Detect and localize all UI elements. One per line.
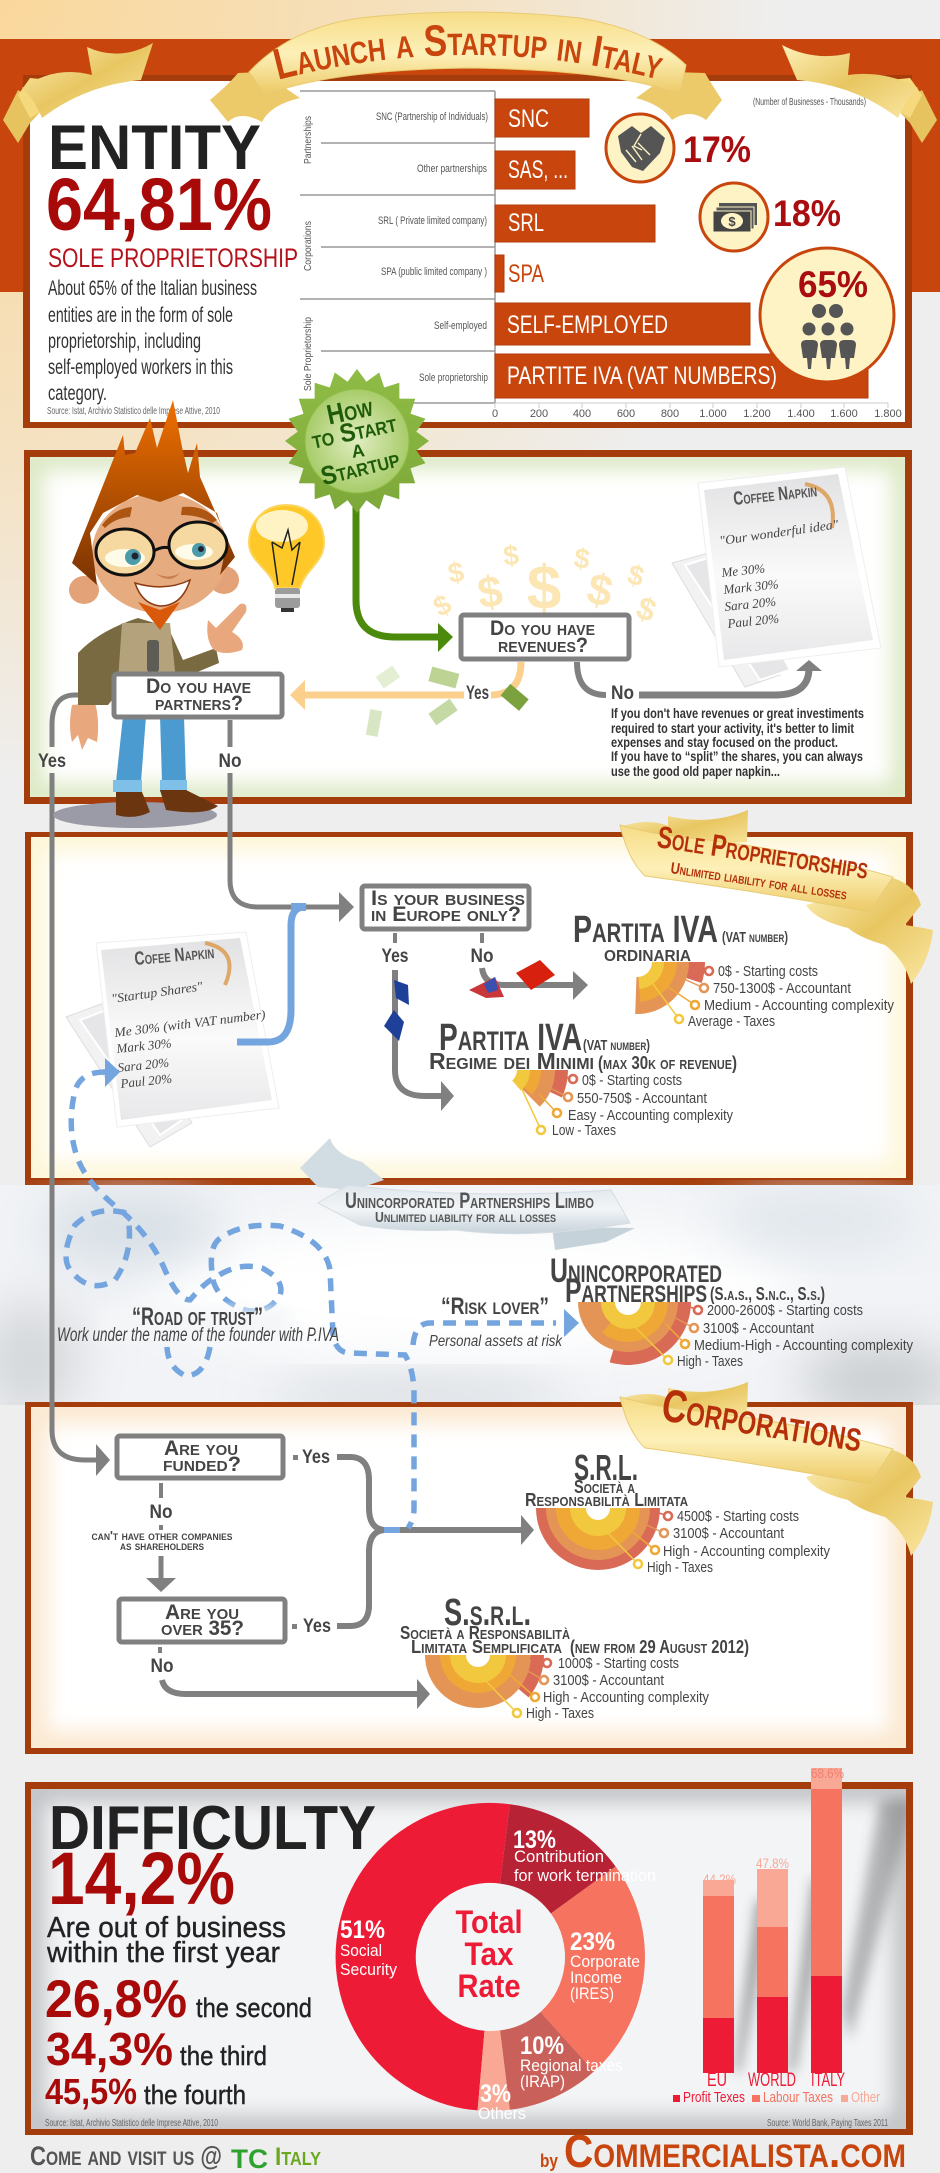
orange header band [0, 39, 940, 292]
source note: Source: Istat, Archivio Statistico delle Imprese Attive, 2010 [47, 406, 220, 417]
bar chart: businesses by legal form: 0 [492, 408, 498, 420]
icon: banknotes 18% [700, 183, 768, 251]
footer: commercialista credit [540, 2125, 906, 2173]
label: 13% contribution: for work termination [514, 1866, 656, 1885]
stat: 65%: 65% [798, 264, 868, 305]
heading: unincorporated partnerships [550, 1252, 825, 1310]
flags: eu [384, 980, 409, 1041]
dollar signs: $ [446, 556, 467, 589]
green arrow to revenues [356, 495, 453, 652]
heading: unincorporated partnerships: (S.a.s., S.n.c., S.s.) [710, 1284, 825, 1304]
fan labels: regime dei minimi: Easy - Accounting complexity [568, 1107, 733, 1124]
heading: ssrl: S.s.r.l. [444, 1592, 531, 1634]
yes paths to srl [292, 1447, 534, 1637]
bar chart: businesses by legal form: SPA [508, 260, 544, 288]
legend: Profit Texes [683, 2089, 745, 2106]
fan labels: unincorporated: High - Taxes [677, 1353, 743, 1370]
bar chart: businesses by legal form: Partnerships [303, 116, 314, 164]
entity description: About 65% of the Italian business [48, 277, 257, 300]
hand: lower [70, 703, 98, 750]
advice text: If you don't have revenues or great investiments [611, 705, 864, 721]
banknotes [366, 666, 529, 737]
badge: how to start a startup: Startup [318, 443, 402, 491]
bar chart: businesses by legal form: SNC (Partnership of Individuals) [376, 111, 488, 123]
label: 3% others: 3% [480, 2080, 511, 2108]
napkin heading: Coffee Napkin [732, 480, 818, 510]
jacket [78, 618, 219, 705]
stacked bars: tax comparison [673, 1765, 880, 2106]
donut center label [456, 1904, 522, 2004]
fan labels: srl [647, 1508, 830, 1576]
bar chart: businesses by legal form: 1.800 [874, 408, 902, 420]
face [92, 493, 228, 613]
bar chart: businesses by legal form: SNC [508, 105, 549, 133]
napkin shares: Paul 20% [726, 611, 780, 631]
ribbon: corporations [620, 1379, 933, 1556]
decision box: over 35: over 35? [161, 1617, 244, 1640]
heading: partita iva regime dei minimi: (VAT number) [583, 1037, 650, 1054]
fan labels: ssrl: 3100$ - Accountant [553, 1672, 665, 1689]
stat: 17%: 17% [683, 129, 751, 170]
fan labels: regime dei minimi [552, 1072, 733, 1139]
title ribbon: Launch a Startup in Italy [273, 25, 664, 80]
heading: ssrl [400, 1592, 749, 1657]
advice text: required to start your activity, it's better to limit [611, 720, 854, 736]
icon: handshake 17% [606, 114, 674, 182]
bar chart: businesses by legal form: 400 [573, 408, 591, 420]
shoes [116, 790, 218, 817]
panel: entity [23, 75, 912, 428]
napkin title: "Startup Shares" [110, 978, 204, 1006]
heading: unincorporated partnerships: Partnerships [565, 1272, 707, 1310]
bar chart: businesses by legal form: Self-employed [434, 320, 487, 332]
dollar signs: $ [632, 589, 661, 629]
napkin shares: Paul 20% [119, 1071, 173, 1091]
hand: pointing [207, 604, 246, 653]
big number: 64,81%: 64,81% [46, 163, 272, 246]
decision box: funded [117, 1436, 283, 1478]
shareholder note [92, 1528, 232, 1553]
donut center label: Tax [464, 1936, 514, 1972]
no label: No [470, 946, 494, 967]
yes label: Yes [466, 683, 489, 704]
fan labels: ssrl: 1000$ - Starting costs [558, 1655, 679, 1672]
bar chart: businesses by legal form: SPA (public limited company ) [381, 266, 487, 278]
dollar signs: $ [527, 554, 561, 623]
title [278, 55, 660, 80]
no label: No [150, 1502, 172, 1523]
napkin shares: Me 30% (with VAT number) [113, 1007, 266, 1040]
decision box: revenues: Do you have [490, 617, 595, 640]
advice text: use the good old paper napkin... [611, 763, 780, 779]
source: world bank: Source: World Bank, Paying Taxes 2011 [767, 2118, 888, 2129]
bar chart: businesses by legal form: Sole proprietorship [419, 372, 488, 384]
icon: people 65% [760, 248, 894, 382]
bar chart: businesses by legal form [300, 91, 902, 420]
bar: world [748, 1855, 796, 2091]
label: 23% corporate income: Corporate [570, 1952, 640, 1971]
fan labels: ordinaria [688, 963, 894, 1030]
fan labels: ssrl [526, 1655, 709, 1722]
no path to ssrl [150, 1647, 430, 1709]
no label: No [611, 683, 634, 704]
heading: srl: Società a [574, 1477, 635, 1497]
napkin shares: Me 30% [720, 560, 766, 580]
bar chart: businesses by legal form: 600 [617, 408, 635, 420]
risk lover note: Personal assets at risk [429, 1333, 563, 1350]
heading: partita iva regime dei minimi: Partita IVA [439, 1017, 582, 1059]
stat: second year: 26,8% [45, 1970, 187, 2029]
heading: ssrl: (new from 29 August 2012) [570, 1637, 749, 1657]
bar chart: businesses by legal form: PARTITE IVA (VAT NUMBERS) [507, 362, 777, 390]
no arrow to napkin [577, 660, 822, 704]
label: 23% corporate income: 23% [570, 1928, 615, 1956]
advice text: If you have to “split” the shares, you can always [611, 748, 863, 764]
flow line: yes from partners to funded [52, 695, 110, 1476]
ribbon heading: Corporations [658, 1379, 866, 1461]
source: istat: Source: Istat, Archivio Statistico delle Imprese Attive, 2010 [45, 2118, 218, 2129]
napkin: startup shares [66, 932, 279, 1147]
heading: partita iva regime dei minimi [429, 1017, 737, 1074]
bar chart: businesses by legal form: Sole Proprietorship [303, 317, 314, 391]
character [53, 400, 246, 828]
fan labels: regime dei minimi: 550-750$ - Accountant [577, 1090, 708, 1107]
eyebrows [102, 507, 217, 528]
fan labels: ssrl: High - Taxes [526, 1705, 594, 1722]
yes arrow to partners [290, 662, 521, 710]
label: 51% social security: 51% [340, 1916, 385, 1944]
first year text: Are out of business [47, 1912, 286, 1944]
napkin shares: Mark 30% [115, 1035, 172, 1056]
label: 10% regional taxes [520, 2032, 623, 2091]
footer: commercialista credit: by [540, 2151, 558, 2171]
fan chart: regime dei minimi [489, 1070, 577, 1134]
yes label: Yes [382, 946, 408, 967]
bar chart: businesses by legal form: (Number of Businesses - Thousands) [753, 97, 866, 108]
entity description: entities are in the form of sole [48, 304, 233, 327]
bar chart: businesses by legal form: 800 [661, 408, 679, 420]
panel: limbo background [0, 1185, 940, 1420]
shadow [53, 802, 217, 828]
heading: entity: ENTITY [48, 113, 261, 183]
title ribbon [210, 12, 722, 122]
fan labels: ordinaria: 750-1300$ - Accountant [713, 980, 852, 997]
risk lover label: “Risk lover” [441, 1293, 549, 1320]
stat: second year [45, 1970, 312, 2029]
heading: partita iva ordinaria [573, 909, 788, 966]
yes label: partners: Yes [38, 751, 66, 772]
flags: usa and china [469, 960, 555, 998]
label: 3% others: Others [478, 2104, 526, 2123]
label: 23% corporate income: Income [570, 1968, 622, 1987]
bar: world: 47.8% [756, 1855, 789, 1871]
label: 51% social security: Social [340, 1941, 382, 1960]
heading: srl: S.R.L. [574, 1447, 638, 1488]
heading: partita iva regime dei minimi: (max 30k of revenue) [598, 1053, 737, 1073]
label: 51% social security: Security [340, 1960, 397, 1979]
decision box: europe [362, 886, 529, 929]
footer: visit us: Come and visit us @ [30, 2141, 222, 2171]
bar chart: businesses by legal form: 200 [530, 408, 548, 420]
fan labels: srl: High - Accounting complexity [663, 1543, 830, 1560]
fan chart: unincorporated [578, 1302, 702, 1365]
big number: 14,2%: 14,2% [48, 1837, 235, 1920]
fan chart: ordinaria [622, 962, 713, 1023]
ears [69, 566, 239, 604]
heading: srl: Responsabilità Limitata [525, 1490, 689, 1510]
label: 13% contribution: Contribution [514, 1847, 604, 1866]
label: 51% social security [340, 1916, 397, 1979]
panel: sole proprietorships [25, 832, 913, 1185]
dollar signs: $ [428, 588, 457, 623]
decision box: revenues: revenues? [498, 634, 588, 657]
heading: partita iva ordinaria: ordinaria [604, 940, 691, 966]
fan chart: ssrl [425, 1655, 551, 1717]
dollar signs [428, 539, 661, 629]
advice text: expenses and stay focused on the product. [611, 734, 838, 750]
yes label: over 35: Yes [303, 1616, 331, 1637]
fan labels: ssrl: High - Accounting complexity [543, 1689, 709, 1706]
stat: 18%: 18% [773, 193, 841, 234]
fan labels: srl: High - Taxes [647, 1559, 713, 1576]
fan labels: unincorporated: 3100$ - Accountant [703, 1320, 815, 1337]
dollar signs: $ [572, 542, 592, 575]
no label: No [150, 1656, 174, 1677]
pencil [147, 640, 159, 672]
jeans [113, 716, 187, 792]
legend: Labour Taxes [763, 2089, 833, 2106]
fan labels: ordinaria: 0$ - Starting costs [718, 963, 818, 980]
decision box: partners [114, 674, 282, 717]
napkin shares: Sara 20% [724, 594, 777, 614]
bar: world: WORLD [748, 2070, 796, 2091]
heading: partita iva regime dei minimi: Regime dei Minimi [429, 1048, 594, 1074]
decision box: over 35: Are you [165, 1601, 239, 1624]
shareholder note: as shareholders [120, 1538, 204, 1553]
yes branch [382, 933, 454, 1111]
risk lover label [429, 1293, 563, 1350]
stat: fourth year [45, 2071, 246, 2112]
icon: light bulb [249, 505, 324, 612]
bar chart: businesses by legal form: 1.600 [830, 408, 858, 420]
label: 3% others [478, 2080, 526, 2123]
legend: Other [851, 2089, 880, 2106]
badge: how to start a startup: to Start [309, 407, 399, 455]
bar chart: businesses by legal form: SRL [508, 209, 544, 237]
panel: corporations [25, 1402, 913, 1754]
subheading: sole proprietorship: SOLE PROPRIETORSHIP [48, 243, 298, 273]
stat: fourth year: the fourth [144, 2080, 246, 2110]
stat: third year: the third [180, 2041, 267, 2071]
decision box: partners: partners? [155, 692, 243, 715]
road of trust label: “Road of trust” [132, 1303, 263, 1331]
bar: italy: 68.6% [811, 1765, 844, 1781]
bar chart: businesses by legal form: Other partnerships [417, 163, 487, 175]
heading: srl [525, 1447, 689, 1510]
limbo subheading: Unlimited liability for all losses [375, 1209, 556, 1226]
bar chart: businesses by legal form: 1.400 [787, 408, 815, 420]
no label: partners: No [218, 751, 242, 772]
bar: eu [703, 1871, 736, 2091]
decision box: funded: Are you [164, 1437, 238, 1460]
napkin idea: "Our wonderful idea" [718, 516, 840, 548]
badge: how to start a startup: How [324, 391, 376, 430]
ribbon heading: Sole Proprietorships [655, 819, 871, 886]
bar chart: businesses by legal form: 1.000 [699, 408, 727, 420]
napkin shares [720, 560, 780, 631]
arrow: into napkin [105, 1058, 120, 1087]
ribbon: limbo [300, 1138, 635, 1250]
fan labels: unincorporated: 2000-2600$ - Starting costs [707, 1302, 863, 1319]
bar chart: businesses by legal form: SELF-EMPLOYED [507, 311, 668, 339]
hair [72, 400, 235, 585]
decision box: revenues [461, 615, 629, 659]
shareholder note: can't have other companies [92, 1528, 232, 1543]
panel: how to start [24, 450, 912, 804]
ribbon: left top tail [3, 43, 153, 143]
dollar signs: $ [583, 564, 617, 617]
bar chart: businesses by legal form: SRL ( Private limited company) [378, 215, 487, 227]
road of trust note: Work under the name of the founder with P.IVA [57, 1325, 339, 1346]
entity description: proprietorship, including [48, 330, 201, 353]
stat: third year [46, 2023, 267, 2075]
label: 13% contribution: 13% [513, 1826, 556, 1854]
label: 10% regional taxes: Regional taxes [520, 2056, 623, 2075]
dollar signs: $ [475, 567, 506, 618]
label: 10% regional taxes: (IRAP) [520, 2072, 565, 2091]
fan labels: unincorporated [677, 1302, 913, 1370]
donut center label: Total [456, 1904, 522, 1940]
donut center label: Rate [458, 1968, 520, 2004]
heading: partita iva ordinaria: (VAT number) [722, 929, 788, 946]
bar: italy: ITALY [811, 2070, 845, 2091]
first year text: within the first year [46, 1937, 280, 1969]
heading: unincorporated partnerships: Unincorporated [550, 1252, 722, 1290]
fan labels: srl: 4500$ - Starting costs [677, 1508, 799, 1525]
ribbon: right top tail [782, 45, 937, 143]
heading: ssrl: Società a Responsabilità [400, 1623, 571, 1643]
dollar signs: $ [502, 539, 521, 572]
icon: banknotes 18%: $ [728, 214, 736, 229]
entity description: category. [48, 382, 107, 405]
fan labels: ordinaria: Average - Taxes [688, 1013, 775, 1030]
flow line: no from partners to europe [230, 720, 354, 922]
glasses [96, 522, 227, 575]
napkin: coffee napkin [672, 467, 881, 687]
stat: second year: the second [196, 1993, 312, 2023]
limbo heading: Unincorporated Partnerships Limbo [345, 1188, 594, 1213]
bar: italy [811, 1765, 845, 2091]
bar: eu: EU [707, 2070, 727, 2091]
legend [673, 2089, 880, 2106]
decision box: europe: in Europe only? [371, 903, 521, 926]
entity description [48, 277, 257, 405]
ribbon: sole proprietorships [620, 810, 933, 984]
label: 10% regional taxes: 10% [520, 2032, 564, 2060]
napkin shares: Mark 30% [722, 576, 779, 597]
goatee [138, 602, 180, 630]
stat: third year: 34,3% [46, 2023, 173, 2075]
arrow: risk lover [564, 1309, 579, 1337]
panel: difficulty [25, 1765, 915, 2135]
shirt [118, 623, 176, 680]
dashed path: road of trust [66, 1072, 556, 1528]
badge: how to start a startup [285, 369, 429, 513]
fan labels: regime dei minimi: Low - Taxes [552, 1122, 616, 1139]
bar: eu: 44.2% [703, 1871, 736, 1887]
smile [135, 580, 190, 606]
fan chart: srl [536, 1508, 672, 1570]
road of trust label [57, 1303, 339, 1346]
bar chart: businesses by legal form: Corporations [303, 221, 314, 271]
fan labels: ordinaria: Medium - Accounting complexity [704, 997, 894, 1014]
no branch [470, 933, 588, 1000]
fan labels: regime dei minimi: 0$ - Starting costs [582, 1072, 682, 1089]
blue connector from napkin [237, 907, 305, 1042]
heading: ssrl: Limitata Semplificata [411, 1637, 563, 1657]
dollar signs: $ [624, 558, 648, 593]
decision box: partners: Do you have [146, 675, 251, 698]
badge: how to start a startup: a [349, 432, 366, 464]
label: 23% corporate income [570, 1928, 640, 2003]
stat: fourth year: 45,5% [45, 2071, 137, 2112]
decision box: europe: Is your business [371, 887, 525, 910]
donut chart: total tax rate [336, 1803, 656, 2123]
label: 23% corporate income: (IRES) [570, 1984, 614, 2003]
decision box: over 35 [119, 1599, 285, 1642]
napkin heading: Cofee Napkin [134, 942, 215, 970]
advice text [611, 705, 864, 779]
napkin shares [113, 1007, 266, 1091]
entity description: self-employed workers in this [48, 356, 233, 379]
logo word: italy: Italy [275, 2143, 321, 2171]
first year text [46, 1912, 286, 1969]
heading: partita iva ordinaria: Partita IVA [573, 909, 718, 951]
bar chart: businesses by legal form: 1.200 [743, 408, 771, 420]
decision box: funded: funded? [163, 1453, 241, 1476]
bar chart: businesses by legal form: SAS, ... [508, 156, 568, 184]
yes label: funded: Yes [302, 1447, 330, 1468]
fan labels: unincorporated: Medium-High - Accounting complexity [694, 1337, 913, 1354]
fan labels: srl: 3100$ - Accountant [673, 1525, 785, 1542]
nose [155, 573, 180, 579]
napkin shares: Sara 20% [117, 1055, 170, 1075]
label: 13% contribution [513, 1826, 656, 1885]
no path between boxes [92, 1483, 232, 1592]
heading: difficulty: DIFFICULTY [49, 1794, 376, 1863]
ribbon subheading: Unlimited liability for all losses [669, 860, 848, 904]
